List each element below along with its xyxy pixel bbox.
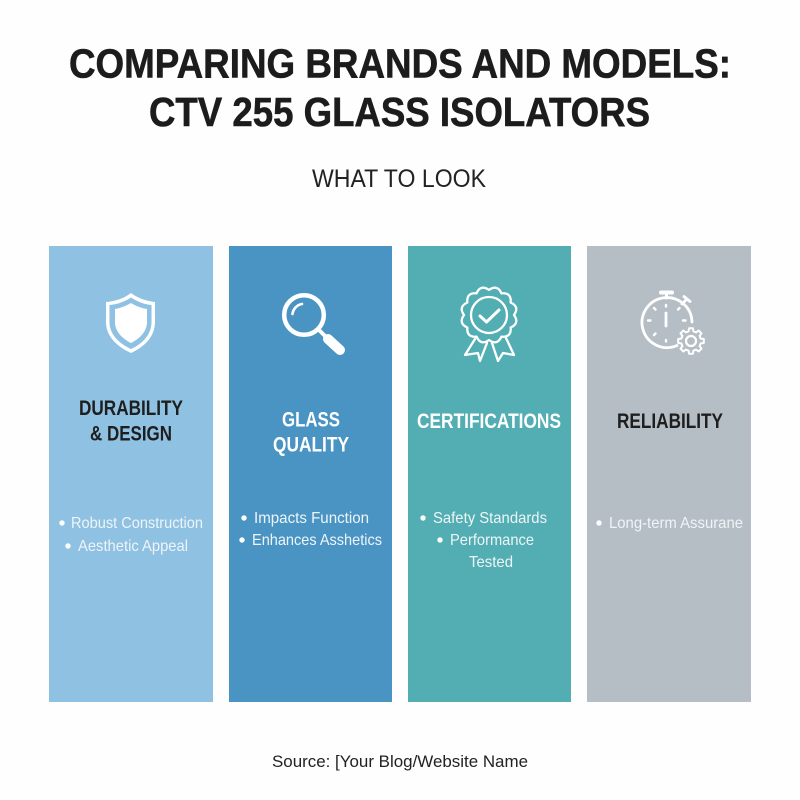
list: certifications: Tested: [469, 554, 513, 571]
list: glass quality: Enhances Asshetics: [252, 532, 382, 549]
panel: certifications: [408, 246, 571, 702]
title: [69, 40, 731, 135]
icon: award rosette: [462, 288, 516, 361]
panel: durability and design: [49, 246, 213, 702]
panel: glass quality: [229, 246, 392, 702]
list: durability and design: Aesthetic Appeal: [78, 538, 188, 555]
list: reliability: Long-term Assurane: [609, 515, 743, 532]
list: certifications: [420, 510, 547, 571]
heading: certifications: CERTIFICATIONS: [417, 410, 561, 433]
heading: reliability: RELIABILITY: [617, 410, 723, 433]
panel: reliability: [587, 246, 751, 702]
title: COMPARING BRANDS AND MODELS:: [69, 40, 731, 86]
heading: durability and design: DURABILITY: [79, 397, 183, 420]
list: glass quality: Impacts Function: [254, 510, 369, 527]
list: durability and design: [59, 515, 203, 555]
list: certifications: Safety Standards: [433, 510, 547, 527]
heading: glass quality: QUALITY: [273, 434, 349, 457]
list: certifications: Performance: [450, 532, 534, 549]
source line: Source: [Your Blog/Website Name: [272, 752, 528, 771]
subtitle: WHAT TO LOOK: [312, 165, 486, 193]
icon: shield: [106, 293, 155, 353]
list: durability and design: Robust Construction: [71, 515, 203, 532]
icon: stopwatch with gear: [642, 292, 704, 354]
title: CTV 255 GLASS ISOLATORS: [149, 89, 650, 135]
heading: durability and design: & DESIGN: [90, 422, 172, 446]
list: glass quality: [239, 510, 382, 549]
icon: magnifying glass: [284, 295, 340, 350]
heading: glass quality: [273, 409, 349, 457]
heading: durability and design: [79, 397, 183, 446]
heading: glass quality: GLASS: [282, 409, 340, 432]
